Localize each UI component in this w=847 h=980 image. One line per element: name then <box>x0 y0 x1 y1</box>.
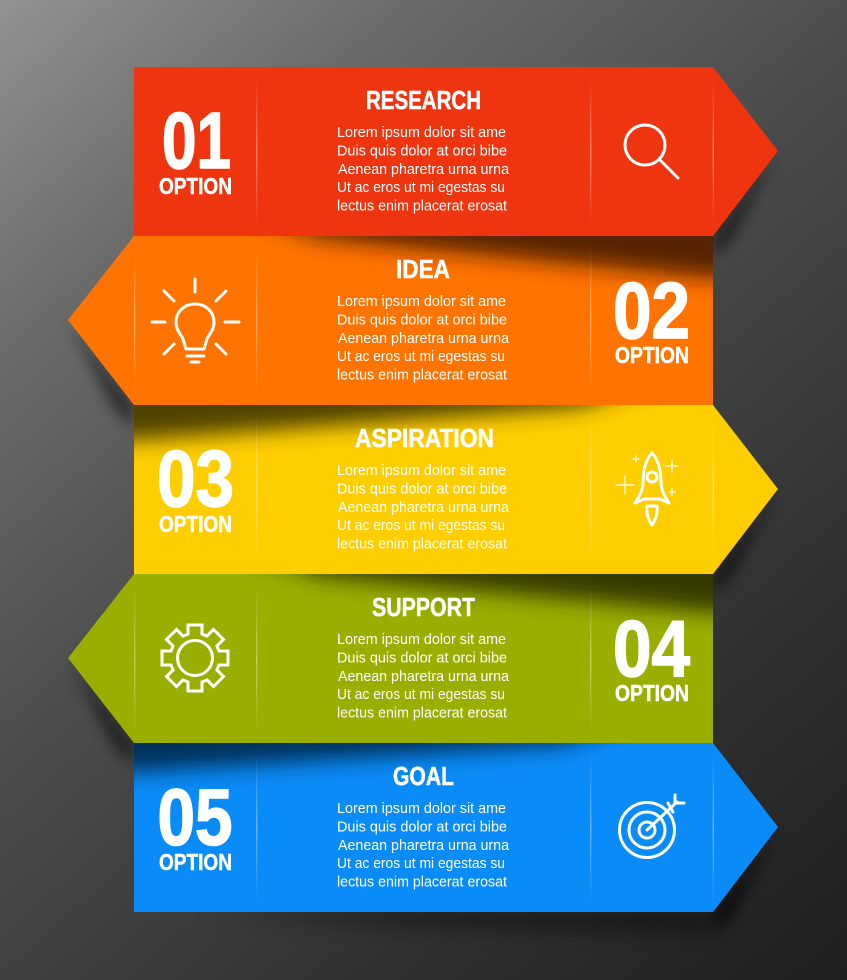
text block: Ut ac eros ut mi egestas su <box>337 856 505 872</box>
icon: light bulb <box>152 279 239 362</box>
text block: Ut ac eros ut mi egestas su <box>337 180 505 196</box>
icon: magnifying glass <box>625 125 678 178</box>
text block: lectus enim placerat erosat <box>337 706 507 722</box>
heading: IDEA <box>396 254 450 284</box>
text block <box>337 801 510 890</box>
text block: Duis quis dolor at orci bibe <box>337 312 507 328</box>
number: 05 <box>158 772 232 862</box>
text block <box>337 125 510 214</box>
text block <box>337 294 510 384</box>
text block: Aenean pharetra urna urna <box>338 669 510 685</box>
band shape <box>68 574 713 743</box>
number: 02 <box>613 266 690 355</box>
number: 01 <box>162 96 231 185</box>
text block: Aenean pharetra urna urna <box>338 838 510 854</box>
icon: gear <box>162 625 228 691</box>
band shape <box>134 743 778 912</box>
text block: Ut ac eros ut mi egestas su <box>337 687 505 703</box>
band shape <box>134 405 778 574</box>
band shape <box>134 67 778 236</box>
band shadows on background <box>68 151 778 934</box>
cast shadow <box>266 574 713 628</box>
option label: OPTION <box>615 680 689 706</box>
text block: lectus enim placerat erosat <box>337 874 507 890</box>
text block: lectus enim placerat erosat <box>337 368 507 384</box>
icon: rocket <box>616 453 678 525</box>
heading: GOAL <box>393 761 454 791</box>
panel: 05 goal <box>134 743 778 912</box>
text block <box>337 632 510 722</box>
option label: OPTION <box>159 173 232 199</box>
option label: OPTION <box>159 849 232 875</box>
text block: Duis quis dolor at orci bibe <box>337 144 507 160</box>
text block: Lorem ipsum dolor sit ame <box>337 463 506 479</box>
cast shadow <box>134 405 644 458</box>
text block: Ut ac eros ut mi egestas su <box>337 518 505 534</box>
fold lines <box>134 246 591 396</box>
option label: OPTION <box>615 342 689 368</box>
fold lines <box>134 584 591 734</box>
text block: Aenean pharetra urna urna <box>338 331 510 347</box>
heading: ASPIRATION <box>355 423 494 453</box>
icon: target <box>620 795 684 858</box>
text block: Duis quis dolor at orci bibe <box>337 482 507 498</box>
text block: Lorem ipsum dolor sit ame <box>337 294 506 310</box>
panel: 02 idea <box>68 236 713 405</box>
text block: Lorem ipsum dolor sit ame <box>337 801 506 817</box>
option label: OPTION <box>159 511 232 537</box>
text block: Lorem ipsum dolor sit ame <box>337 632 506 648</box>
fold lines <box>256 77 714 227</box>
text block: lectus enim placerat erosat <box>337 198 507 214</box>
heading: RESEARCH <box>366 85 481 115</box>
band shape <box>68 236 713 405</box>
text block: Lorem ipsum dolor sit ame <box>337 125 506 141</box>
text block: Ut ac eros ut mi egestas su <box>337 349 505 365</box>
text block: lectus enim placerat erosat <box>337 536 507 552</box>
fold lines <box>256 415 714 565</box>
fold lines <box>256 753 714 903</box>
panel: 04 support <box>68 574 713 743</box>
text block: Duis quis dolor at orci bibe <box>337 650 507 666</box>
cast shadow <box>262 236 713 296</box>
number: 03 <box>157 434 234 523</box>
text block <box>337 463 510 552</box>
text block: Duis quis dolor at orci bibe <box>337 820 507 836</box>
panel: 03 aspiration <box>134 405 778 574</box>
text block: Aenean pharetra urna urna <box>338 162 510 178</box>
cast shadow <box>134 743 619 788</box>
heading: SUPPORT <box>372 592 475 622</box>
text block: Aenean pharetra urna urna <box>338 500 510 516</box>
number: 04 <box>613 604 690 693</box>
panel: 01 research <box>134 67 778 236</box>
